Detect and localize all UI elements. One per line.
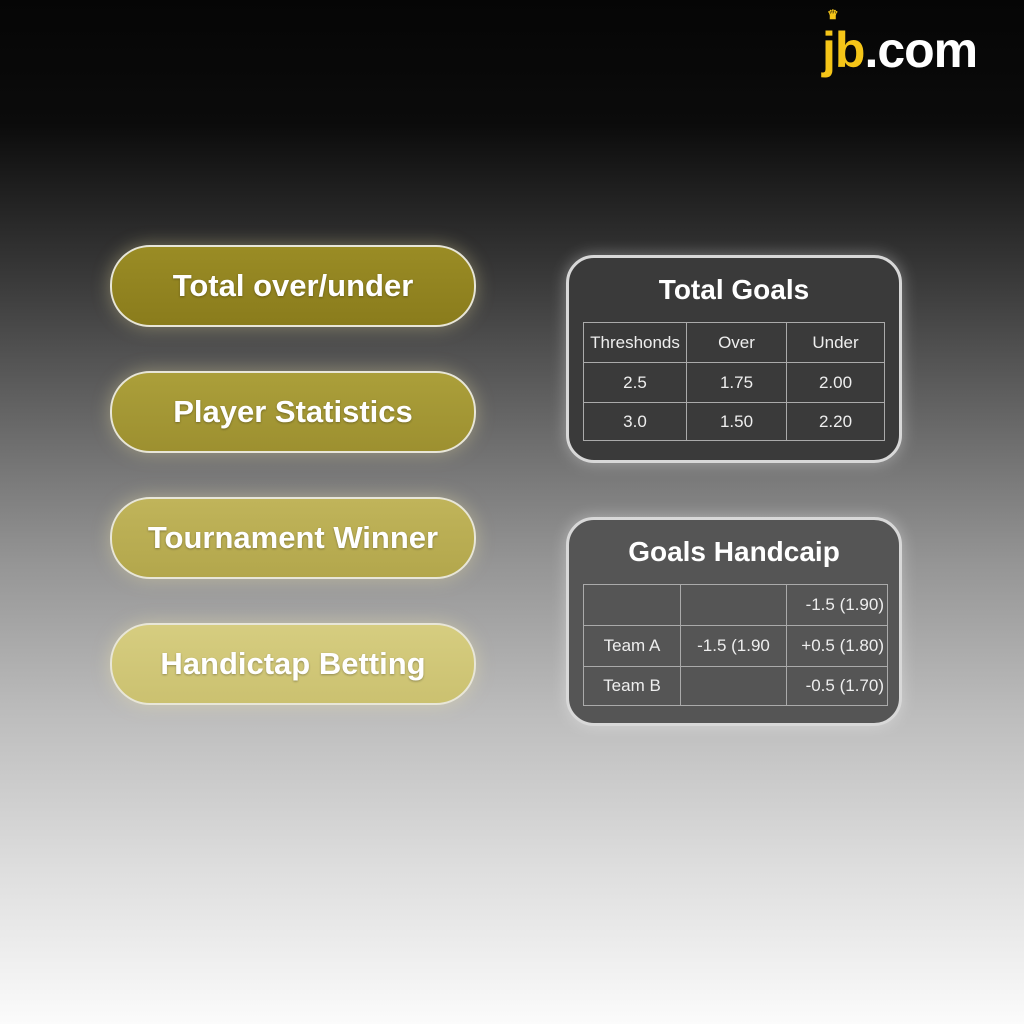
heading: Goals Handcaip [628, 536, 840, 567]
pill: handicap betting [110, 623, 476, 705]
text: ♛ [827, 7, 838, 22]
pill: tournament winner [110, 497, 476, 579]
table: total goals: Over [718, 332, 755, 352]
pill: handicap betting: Handictap Betting [160, 646, 426, 681]
table: total goals [583, 322, 885, 441]
heading: Total Goals [659, 274, 809, 305]
table: total goals: Threshonds [590, 332, 680, 352]
panel: goals handicap [566, 517, 902, 726]
pill: player statistics [110, 371, 476, 453]
table: handicap: -0.5 (1.70) [806, 676, 884, 695]
table: handicap [583, 584, 888, 706]
panel: total goals [566, 255, 902, 463]
table: total goals: 1.50 [720, 412, 753, 430]
pill: tournament winner: Tournament Winner [148, 520, 438, 555]
table: handicap: -1.5 (1.90 [697, 636, 770, 655]
table: total goals: 3.0 [623, 412, 647, 430]
table: handicap: Team A [604, 636, 660, 655]
pill: total over/under [110, 245, 476, 327]
table: total goals: 2.20 [819, 412, 852, 430]
table: total goals: 2.00 [819, 372, 852, 392]
table: handicap: -1.5 (1.90) [806, 595, 884, 614]
table: handicap: +0.5 (1.80) [801, 636, 884, 655]
pill: player statistics: Player Statistics [173, 394, 413, 429]
table: handicap: Team B [603, 676, 661, 695]
table: total goals: Under [812, 332, 859, 352]
pill: total over/under: Total over/under [173, 268, 413, 303]
table: total goals: 1.75 [720, 372, 753, 392]
logo: jb.com [822, 22, 977, 78]
table: total goals: 2.5 [623, 372, 647, 392]
